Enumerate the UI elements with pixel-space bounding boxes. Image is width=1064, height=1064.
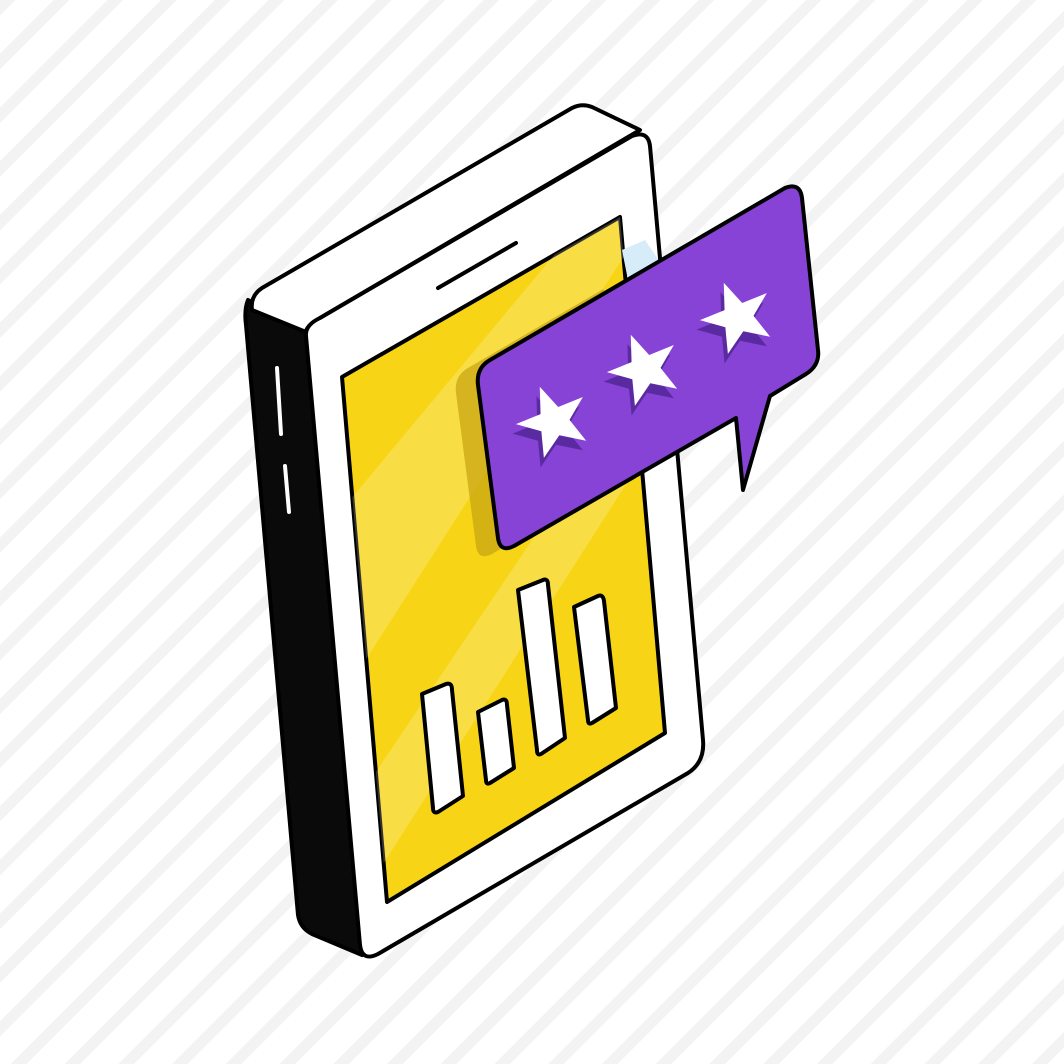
phone front — [306, 134, 703, 957]
screen glare — [352, 217, 626, 863]
speech bubble — [478, 186, 818, 548]
phone side — [245, 300, 362, 955]
light blue area — [622, 240, 660, 280]
screen — [342, 217, 665, 902]
speaker — [438, 243, 516, 288]
side buttons — [277, 368, 289, 512]
bubble shadow — [456, 289, 604, 556]
bar chart — [422, 580, 616, 812]
stars — [500, 269, 785, 472]
phone — [245, 105, 703, 957]
phone top — [252, 105, 640, 332]
